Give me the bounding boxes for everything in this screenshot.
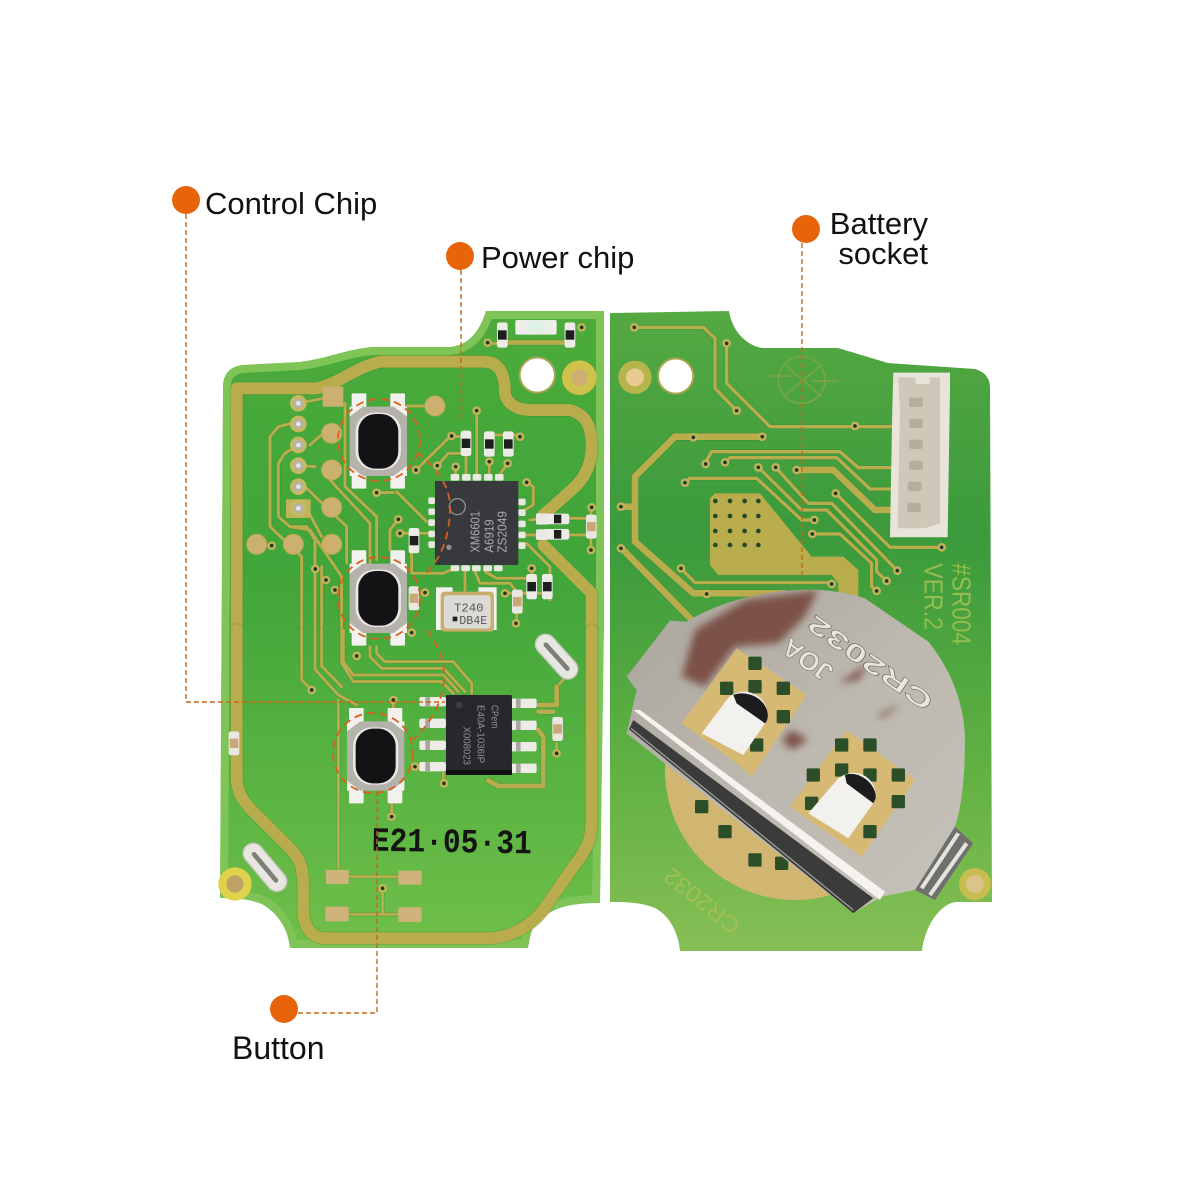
gold battery contact disc — [665, 640, 925, 900]
board marking: #SR004 VER.2: #SR004 — [946, 563, 976, 645]
button 3 — [347, 708, 404, 803]
board outline: front — [220, 311, 604, 948]
label: Control Chip — [172, 186, 445, 702]
board outline: rear — [610, 311, 992, 951]
end tab — [915, 827, 973, 900]
power chip SOIC — [419, 695, 537, 775]
panel: rear circuit board — [610, 311, 992, 951]
spring tabs — [702, 692, 767, 755]
traces: rear — [617, 323, 976, 645]
label: Control Chip: Control Chip — [205, 186, 377, 221]
gold copper traces: front lower — [218, 628, 592, 938]
panel: front circuit board — [218, 311, 604, 948]
label: Power chip — [446, 240, 634, 420]
silkscreen logo — [770, 357, 838, 403]
rear corner via — [959, 868, 991, 900]
clip windows — [682, 648, 807, 777]
embossed clip text: CR2032 — [803, 609, 938, 716]
crystal T240: T240 — [454, 602, 484, 616]
label: Battery socket — [792, 206, 928, 580]
board marking: #SR004 VER.2 — [918, 563, 976, 645]
control chip XM6601: ZS2049 — [495, 511, 510, 553]
mounting hole and via: rear — [618, 357, 694, 395]
mounting hole and via — [519, 356, 597, 395]
label: Power chip: Power chip — [481, 240, 634, 275]
front edge strips — [633, 710, 885, 900]
date code: E21·05·31 — [371, 824, 532, 864]
label: Battery socket: Battery — [830, 206, 928, 241]
SOIC surrounding traces — [488, 687, 557, 786]
battery holder CR2032 — [627, 590, 973, 940]
pads: front board — [247, 323, 596, 628]
gold copper traces: front upper — [237, 320, 597, 646]
pads: lower board — [229, 628, 563, 922]
battery socket connector — [890, 373, 950, 537]
LED and tip resistors — [497, 320, 575, 348]
embossed clip logo: JOA — [776, 632, 838, 688]
silkscreen CR2032: CR2032 — [659, 863, 745, 940]
power chip SOIC: X008023 — [460, 727, 471, 765]
rear vias — [617, 323, 946, 598]
crystal T240 — [436, 587, 497, 632]
wire clips — [239, 630, 582, 895]
crystal T240: DB4E — [459, 614, 487, 628]
control chip XM6601 — [428, 474, 526, 571]
highlight: dashed button circles — [333, 399, 450, 793]
label: Button — [232, 790, 377, 1066]
control chip XM6601: XM6601 — [467, 511, 482, 553]
label: Button: Button — [232, 1030, 325, 1066]
yellow corner via — [218, 867, 252, 901]
power chip SOIC: E40A-1036IP — [475, 705, 486, 764]
control chip XM6601: A6919 — [481, 519, 496, 553]
buttons 1 and 2 — [350, 393, 407, 646]
power chip SOIC: CPem — [489, 705, 500, 728]
metal clip — [627, 590, 973, 913]
ground plane with via grid — [710, 493, 858, 598]
board marking: #SR004 VER.2: VER.2 — [918, 563, 948, 630]
small surface mount parts — [409, 431, 597, 614]
label: Battery socket: socket — [838, 236, 928, 271]
